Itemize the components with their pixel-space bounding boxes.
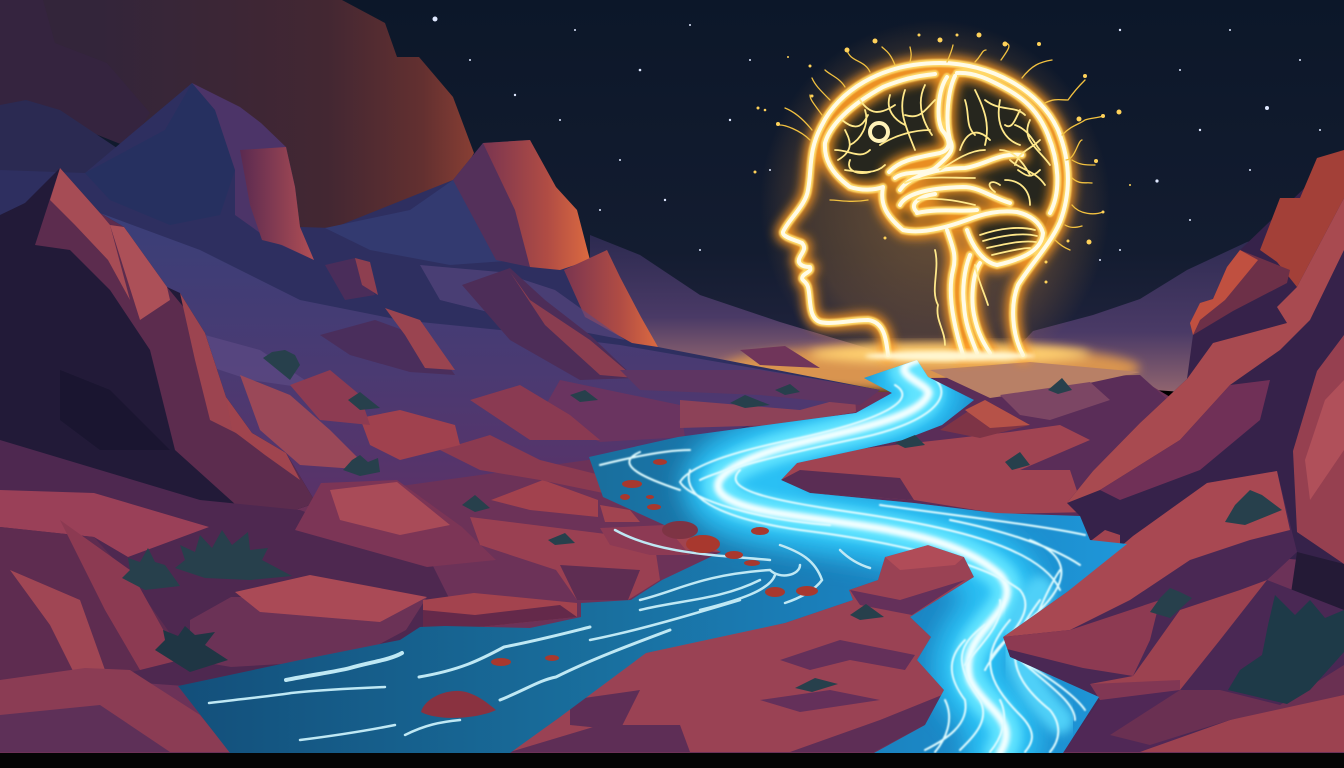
- glowing sparks around head: [754, 32, 1131, 284]
- brain dark interior: [825, 75, 1053, 265]
- frontal lobe ring: [870, 123, 888, 141]
- left channel streaks: [209, 530, 870, 740]
- mountains left and center: [0, 83, 880, 500]
- head base light pool: [865, 351, 1035, 361]
- brain and head neon outline: [780, 43, 1103, 355]
- river water: [178, 360, 1127, 753]
- right land slabs: [780, 362, 1190, 530]
- radiating sprouts: [780, 43, 1103, 250]
- far left blue slope: [0, 100, 120, 190]
- top left dark peaks: [0, 0, 150, 147]
- ground base: [0, 375, 1344, 753]
- distant hills: [590, 230, 1290, 400]
- desert grass tufts: [122, 350, 1344, 704]
- white neon core: [783, 63, 1068, 355]
- river light strands: [600, 375, 1085, 752]
- head fill: [783, 63, 1068, 355]
- stars: [432, 16, 1321, 261]
- central island: [510, 545, 974, 752]
- left cliffs and slabs: [0, 168, 880, 752]
- outer orange glow: [783, 63, 1068, 355]
- sky: [0, 0, 1344, 360]
- yellow neon tube: [783, 63, 1068, 355]
- river stones: [421, 459, 818, 718]
- far left cliff: [30, 0, 474, 250]
- brain veins: [835, 85, 1050, 345]
- right cliffs: [1003, 150, 1344, 752]
- river glow bands: [718, 360, 1060, 753]
- bottom black strip: [0, 753, 1344, 768]
- head halo glow: [760, 20, 1110, 390]
- horizon glow plain: [720, 344, 1140, 392]
